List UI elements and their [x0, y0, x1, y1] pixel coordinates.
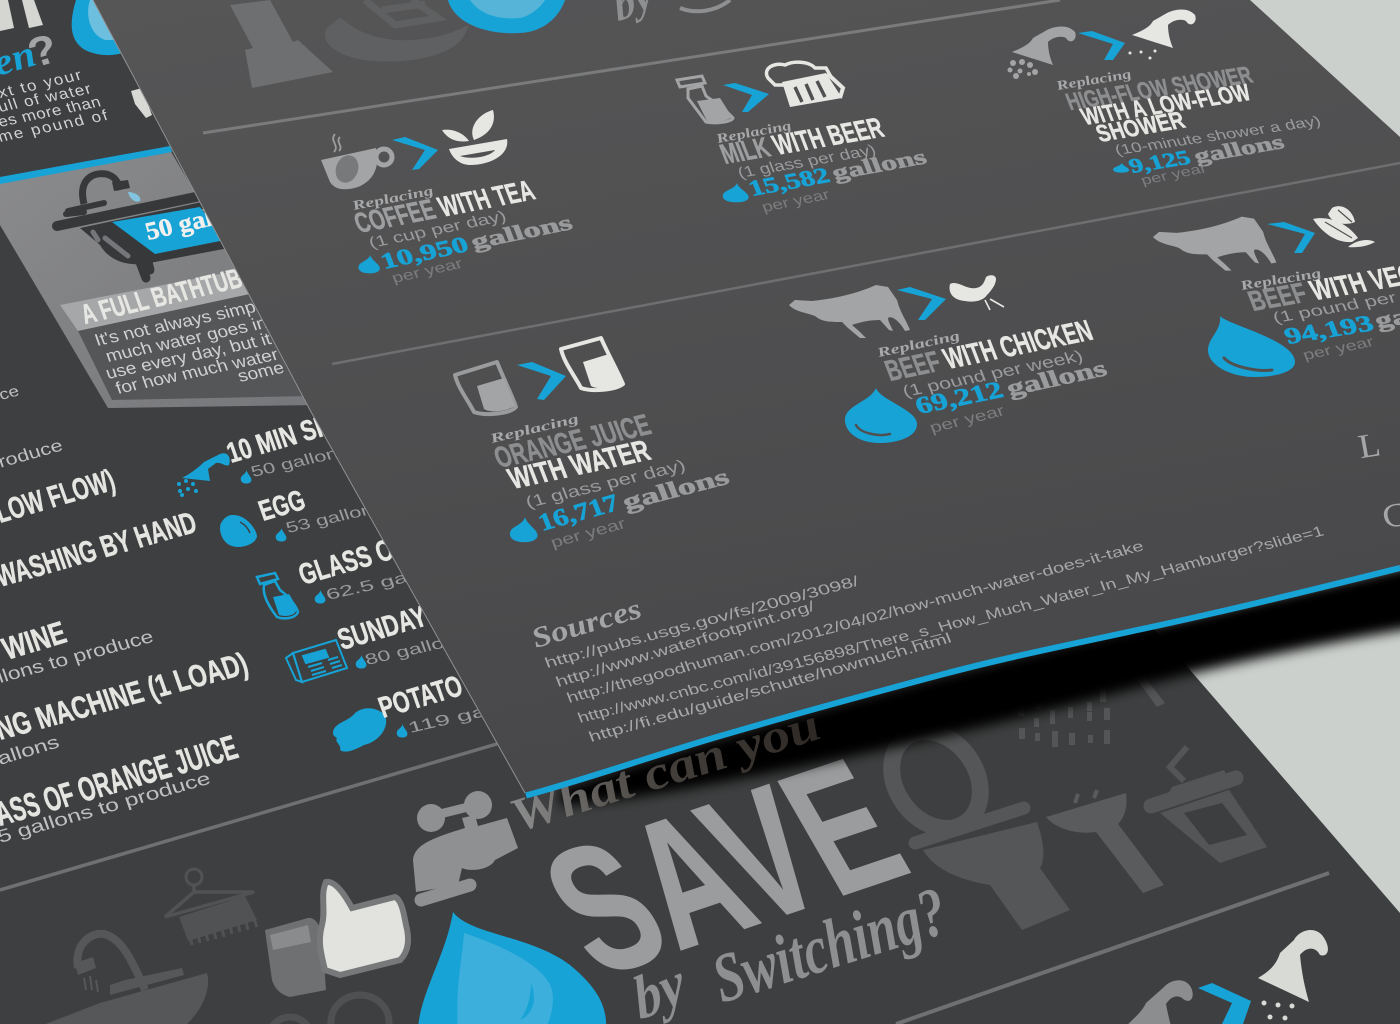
- arrow: chevron: [392, 137, 438, 170]
- callout heading band: [60, 263, 250, 331]
- list item: potato: 119 gallons: [406, 691, 542, 737]
- icon: lower grey shower: [1122, 980, 1193, 1024]
- icon: water drop: [845, 388, 917, 443]
- heading: by switching: [626, 873, 956, 1024]
- heading: save: SAVE: [513, 722, 936, 1014]
- text: beef with chicken: (1 pound per week): [899, 346, 1086, 401]
- icon: tap: [413, 791, 518, 900]
- sources list: Sources: [527, 593, 646, 654]
- text: shower switch: 9,125: [1125, 145, 1194, 177]
- text: orange juice with water: WITH WATER: [503, 433, 655, 495]
- icon: water glass: [561, 338, 623, 390]
- list item: egg: [254, 484, 386, 542]
- sources list: http://www.waterfootprint.org/: [554, 598, 818, 691]
- icon: towel on hanger: [165, 869, 257, 945]
- list item: sunday paper: SUNDAY PAPER: [333, 577, 508, 656]
- panel: orange juice to water: [455, 338, 733, 552]
- icon: bathtub: [57, 174, 261, 278]
- intro paragraph fragment: [0, 67, 110, 146]
- icon: coffee cup: [321, 134, 392, 189]
- text: milk with beer: [713, 112, 930, 216]
- list item: glass of milk: 62.5 gallons: [324, 558, 460, 604]
- arrow: chevron: [1267, 222, 1315, 253]
- list item: egg: EGG: [254, 484, 309, 527]
- sources list: http://www.cnbc.com/id/39156898/There_s_How_Much_Water_In_My_Hamburger?slide=1: [576, 523, 1326, 727]
- arrow: chevron: [723, 83, 769, 112]
- list item: potato: POTATO: [374, 669, 467, 724]
- sources list: http://thegoodhuman.com/2012/04/02/how-much-water-does-it-take: [565, 538, 1146, 707]
- text: milk with beer: (1 glass per day): [735, 142, 879, 182]
- left list column: WASHING BY HAND: [0, 505, 201, 593]
- heading fragment: by: [608, 0, 730, 32]
- text: shower switch: SHOWER: [1092, 107, 1189, 147]
- text: shower switch: per year: [1139, 161, 1209, 189]
- arrow: chevron: [1078, 31, 1125, 60]
- list item: glass of milk: [294, 513, 467, 604]
- text: milk with beer: gallons: [828, 145, 930, 184]
- icon: high-flow shower: [1008, 26, 1076, 79]
- callout text box: some: [235, 358, 287, 386]
- panel: full bathtub callout: [0, 146, 320, 408]
- text: milk with beer: Replacing: [713, 119, 794, 147]
- text: beef with vegetables: 94,193: [1281, 311, 1377, 349]
- icon: pedestal sink: [1046, 790, 1164, 893]
- icon: leaves: [1313, 206, 1375, 247]
- panel: top sheet: [93, 0, 1400, 795]
- text: beef with chicken: per year: [927, 402, 1008, 437]
- icon: blue newspaper: [286, 640, 347, 682]
- icon: toilet: [873, 714, 1070, 930]
- text: coffee with tea: COFFEE WITH TEA: [350, 175, 539, 239]
- icon: milk bottle: [677, 76, 733, 123]
- text: beef with vegetables: per year: [1300, 334, 1376, 364]
- text: shower switch: [1053, 62, 1323, 189]
- list item: 10 min shower: [222, 390, 401, 484]
- text: beef with chicken: 69,212: [911, 376, 1007, 419]
- left list column: NG MACHINE (1 LOAD): [0, 647, 253, 747]
- text: milk with beer: 15,582: [745, 164, 833, 201]
- heading: what can you: What can you: [502, 699, 828, 842]
- text: coffee with tea: [349, 175, 576, 287]
- text: beef with chicken: BEEF WITH CHICKEN: [880, 313, 1097, 387]
- icon: large water drop: [418, 912, 606, 1024]
- icon: beer mug: [766, 62, 843, 107]
- list item: egg: 53 gallons: [284, 498, 386, 537]
- icon: top-left water drop: [72, 0, 125, 55]
- list item: 10 min shower: 50 gallons: [249, 442, 351, 481]
- text: orange juice with water: [486, 407, 733, 552]
- text: coffee with tea: (1 cup per day): [366, 208, 509, 252]
- text: shower switch: HIGH-FLOW SHOWER: [1062, 62, 1257, 115]
- text: coffee with tea: per year: [390, 256, 465, 287]
- text: shower switch: Replacing: [1053, 67, 1134, 94]
- callout heading band: A FULL BATHTUB: [77, 263, 246, 330]
- white letter fragment: [131, 88, 152, 118]
- text: orange juice with water: per year: [548, 515, 629, 552]
- panel: coffee to tea: [321, 110, 576, 287]
- icon: juice glass: [455, 362, 516, 414]
- blue paper edge: [526, 568, 1400, 796]
- arrow: lower chevron: [1198, 983, 1251, 1024]
- icon: sink with faucet: [30, 934, 208, 1024]
- text: shower switch: gallons: [1190, 130, 1288, 167]
- list item: 10 min shower: 10 MIN SHOWER: [222, 390, 401, 469]
- callout text box: use every day, but it: [103, 329, 274, 383]
- panel: beef to chicken: [789, 275, 1111, 443]
- left list column: 5 gallons to produce: [0, 769, 213, 847]
- icon: blue shower: [177, 453, 230, 497]
- icon: shower spray pattern: [1018, 675, 1165, 747]
- text: orange juice with water: gallons: [619, 464, 733, 515]
- left list column: [0, 382, 253, 847]
- shadow cast by top sheet: [560, 555, 1400, 805]
- list item: sunday paper: 80 gallons: [363, 629, 470, 669]
- text: orange juice with water: (1 glass per day): [522, 456, 688, 512]
- icon: cow: [789, 285, 910, 338]
- list item: glass of milk: GLASS OF MILK: [294, 513, 467, 591]
- icon: tea bowl and leaves: [442, 110, 507, 165]
- ring icon fragments: [268, 995, 389, 1024]
- icon: top drop fragment: [448, 0, 565, 33]
- top-left heading fragments: ?: [22, 25, 64, 77]
- text: coffee with tea: 10,950: [377, 233, 472, 274]
- text: beef with chicken: gallons: [1003, 356, 1111, 401]
- icon: water drop: [1208, 316, 1295, 377]
- text: beef with vegetables: [1236, 250, 1400, 364]
- left list column: WINE: [0, 616, 71, 667]
- icon: pillar fragment: [230, 0, 333, 88]
- text: milk with beer: MILK WITH BEER: [716, 112, 888, 170]
- icon: blue potato: [333, 708, 386, 752]
- callout text box: much water goes into: [103, 310, 285, 366]
- sources list: http://pubs.usgs.gov/fs/2009/3098/: [543, 573, 862, 672]
- top-left heading fragments: [0, 0, 64, 84]
- heading: by switching: Switching?: [704, 873, 956, 1018]
- panel: milk to beer: [677, 62, 930, 216]
- panel: high-flow to low-flow shower: [1008, 10, 1323, 189]
- icon: cow: [1153, 217, 1276, 271]
- callout text box: [78, 290, 310, 400]
- list item: potato: [374, 669, 542, 738]
- callout text box: It's not always simple to: [92, 290, 293, 350]
- text: orange juice with water: 16,717: [534, 489, 623, 536]
- icon: lower white shower: [1258, 930, 1328, 1020]
- icon: low-flow shower: [1128, 10, 1196, 60]
- text: coffee with tea: Replacing: [349, 184, 436, 214]
- text: beef with chicken: [873, 313, 1111, 437]
- icon: takeaway cup: [1151, 747, 1267, 863]
- icon: blue egg: [220, 515, 257, 547]
- text: shower switch: (10-minute shower a day): [1113, 113, 1323, 159]
- text: orange juice with water: ORANGE JUICE: [489, 407, 655, 474]
- list item: sunday paper: [333, 577, 508, 669]
- logo fragment: [1350, 426, 1400, 535]
- arrow: chevron: [517, 362, 566, 400]
- text: orange juice with water: Replacing: [486, 412, 581, 447]
- icon: rooster: [950, 275, 1004, 310]
- icon: thumbs up: [265, 882, 408, 997]
- text: coffee with tea: gallons: [467, 211, 576, 253]
- icon: scroll fragment: [328, 0, 462, 58]
- icon: blue bottle: [257, 573, 298, 618]
- text: shower switch: WITH A LOW-FLOW: [1077, 80, 1255, 130]
- logo fragment: L: [1350, 426, 1385, 465]
- text: milk with beer: per year: [760, 187, 832, 216]
- text: beef with vegetables: Replacing: [1236, 266, 1324, 294]
- arrow: chevron: [897, 287, 946, 320]
- panel: beef to vegetables: [1153, 206, 1400, 377]
- sources list: http://fi.edu/guide/schutte/howmuch.html: [587, 630, 954, 746]
- callout text box: for how much water: [113, 345, 281, 398]
- text: beef with chicken: Replacing: [873, 329, 962, 361]
- left list column: ASS OF ORANGE JUICE: [0, 728, 243, 833]
- icon: bathtub: 50 gallons: [142, 193, 261, 246]
- sources list: [527, 523, 1326, 746]
